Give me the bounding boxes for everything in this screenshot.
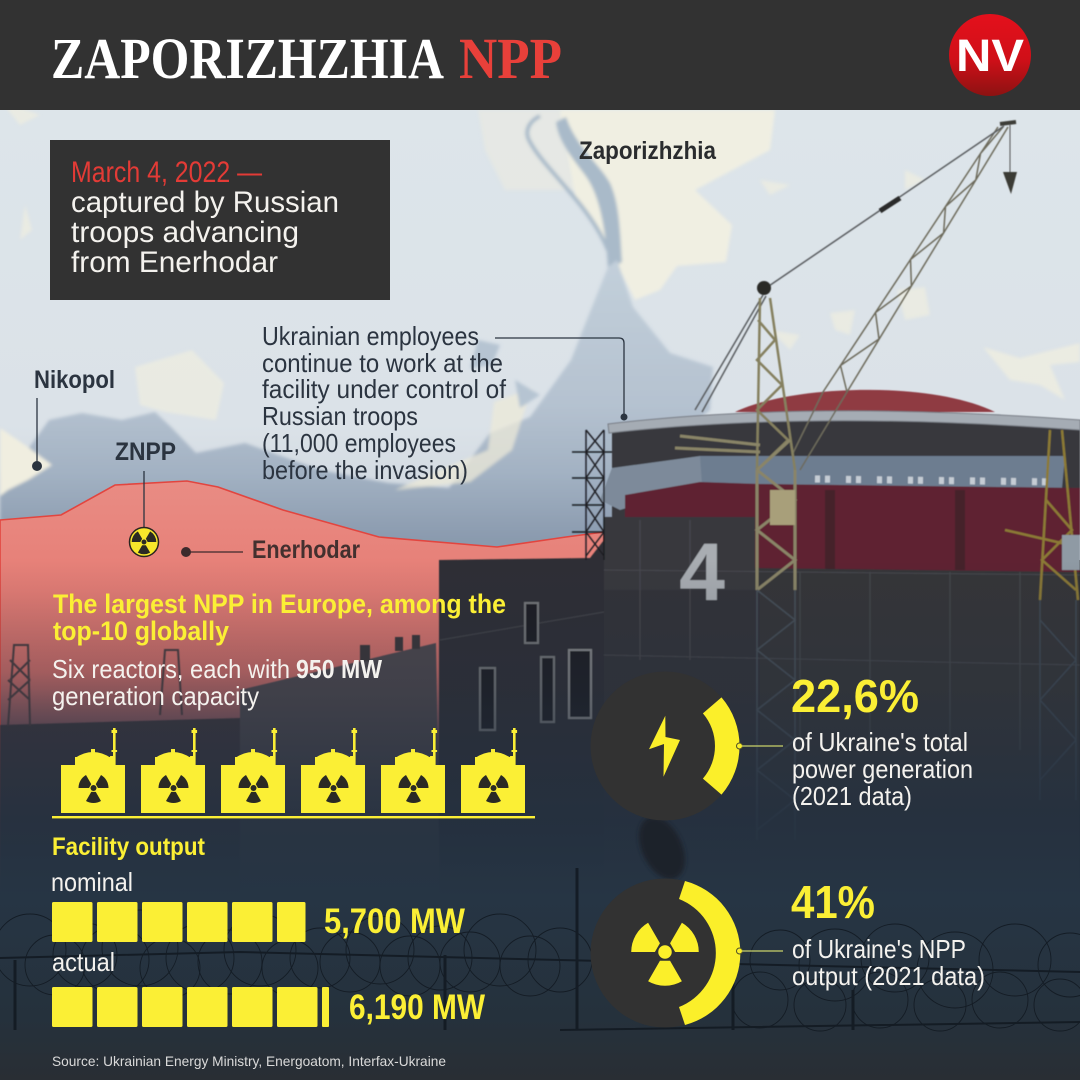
callout: employees: (11,000 employees xyxy=(262,428,456,458)
title accent: NPP xyxy=(459,26,562,91)
callout: employees: Ukrainian employees xyxy=(262,321,479,351)
text: six reactors xyxy=(52,654,382,711)
callout: employees: before the invasion) xyxy=(262,455,468,485)
logo: NV xyxy=(949,14,1031,96)
map marker: Nikopol: Nikopol xyxy=(34,366,115,394)
callout: employees: facility under control of xyxy=(262,374,507,404)
stat: 22,6%: power generation xyxy=(792,754,973,784)
callout: employees: Russian troops xyxy=(262,401,418,431)
stat: 22,6%: of Ukraine's total xyxy=(792,727,968,757)
stat: 22,6% xyxy=(791,670,973,811)
donut: 41% NPP output xyxy=(590,878,783,1028)
plant photo xyxy=(0,122,1080,900)
bar: nominal output xyxy=(52,902,306,942)
info box: capture date: troops advancing xyxy=(71,216,299,249)
map label: Zaporizhzhia: Zaporizhzhia xyxy=(579,137,717,165)
bar: actual output xyxy=(52,987,329,1027)
crane mast xyxy=(757,298,795,470)
map marker: Enerhodar: Enerhodar xyxy=(252,536,360,564)
text: six reactors: Six reactors, each with xyxy=(52,654,290,684)
map marker: Enerhodar xyxy=(181,536,360,564)
logo: NV: NV xyxy=(956,30,1024,81)
callout: employees: continue to work at the xyxy=(262,348,503,378)
low building xyxy=(240,643,440,900)
callout: employees xyxy=(262,321,628,485)
building windows xyxy=(525,603,538,643)
heading: largest NPP: top-10 globally xyxy=(53,616,229,646)
river xyxy=(527,116,608,250)
occupied red zone xyxy=(0,481,604,900)
info box: capture date: captured by Russian xyxy=(71,186,339,219)
scaffold tower xyxy=(572,430,612,560)
heading: largest NPP: The largest NPP in Europe, among the xyxy=(53,589,506,619)
digit painted on reactor: 4 xyxy=(679,527,725,618)
value: 5,700 MW: 5,700 MW xyxy=(324,902,465,941)
label: nominal: nominal xyxy=(51,867,133,897)
stat: 22,6%: 22,6% xyxy=(791,670,919,722)
text: six reactors: 950 MW xyxy=(296,654,382,684)
map marker: ZNPP xyxy=(115,438,176,556)
lower walls xyxy=(604,517,755,600)
info box: capture date: March 4, 2022 — xyxy=(71,156,262,189)
stat: 22,6%: (2021 data) xyxy=(792,781,912,811)
heading: facility output: Facility output xyxy=(52,833,206,861)
stat: 41%: of Ukraine's NPP xyxy=(792,934,966,964)
dark photo fade xyxy=(0,560,1080,1080)
map marker: Nikopol xyxy=(32,366,115,471)
title: ZAPORIZHZHIA xyxy=(51,26,444,91)
source: Source: Ukrainian Energy Ministry, Energoatom, Interfax-Ukraine xyxy=(52,1053,446,1069)
stat: 41%: output (2021 data) xyxy=(792,961,985,991)
hanging bucket xyxy=(630,810,694,886)
heading: largest NPP xyxy=(53,589,506,646)
donut: 22.6% power generation xyxy=(590,672,783,820)
drum xyxy=(612,414,1080,520)
dome xyxy=(735,390,995,412)
value: 6,190 MW: 6,190 MW xyxy=(349,988,485,1027)
map marker: ZNPP: ZNPP xyxy=(115,438,176,466)
barbed wire fence xyxy=(0,868,1080,1031)
reservoir water xyxy=(0,260,713,560)
stat: 41%: 41% xyxy=(791,876,875,928)
icons: six reactors xyxy=(52,728,535,818)
label: actual: actual xyxy=(52,947,115,977)
right crane xyxy=(1005,430,1078,600)
text: six reactors: generation capacity xyxy=(52,681,259,711)
header bar xyxy=(0,0,1080,110)
info box: capture date: from Enerhodar xyxy=(71,246,278,279)
map background xyxy=(0,100,1080,560)
crane boom xyxy=(793,127,1008,470)
stat: 41% xyxy=(791,876,985,991)
info box: capture date xyxy=(50,140,390,300)
